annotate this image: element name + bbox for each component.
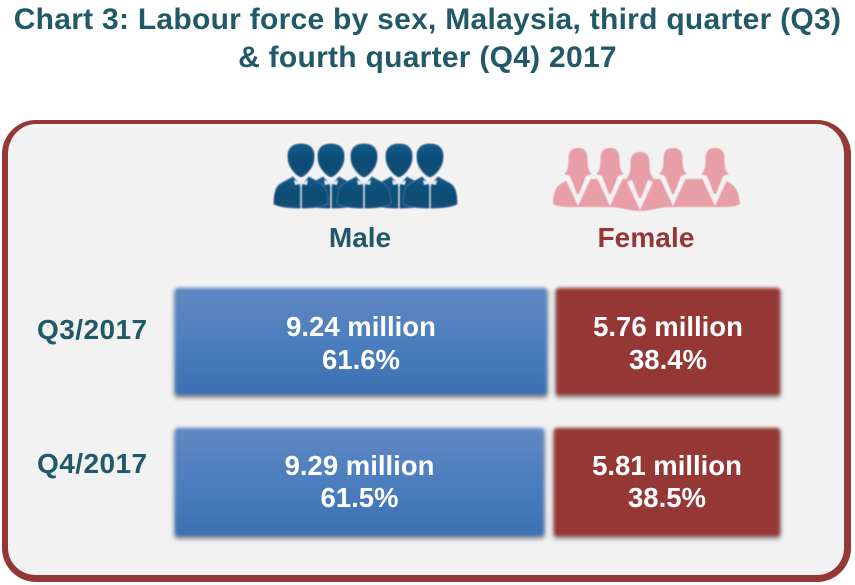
bar: female Q3 (552, 285, 784, 401)
bar: male Q4 (171, 425, 548, 542)
panel: labour force table (2, 120, 851, 582)
bar: male Q3: 61.6% (322, 344, 400, 375)
title: Chart 3: Labour force by sex, Malaysia, third quarter (Q3) (14, 3, 841, 36)
title: & fourth quarter (Q4) 2017 (238, 41, 617, 74)
bar: female Q4: 5.81 million (592, 450, 742, 481)
row label: Q4/2017: Q4/2017 (37, 448, 148, 479)
bar: female Q4: 38.5% (628, 482, 706, 513)
bar: female Q4 (550, 425, 784, 542)
heading: female: Female (597, 222, 695, 253)
title (14, 3, 841, 74)
bar: male Q3: 9.24 million (286, 311, 436, 342)
row label: Q3/2017: Q3/2017 (37, 314, 148, 345)
bar: male Q4: 61.5% (320, 482, 398, 513)
icon: male group (272, 142, 458, 210)
bar: female Q3: 5.76 million (593, 311, 743, 342)
bar: female Q3: 38.4% (629, 344, 707, 375)
icon: female group (552, 148, 740, 212)
bar: male Q4: 9.29 million (285, 450, 434, 481)
heading: male: Male (329, 222, 391, 253)
bar: male Q3 (171, 285, 551, 401)
